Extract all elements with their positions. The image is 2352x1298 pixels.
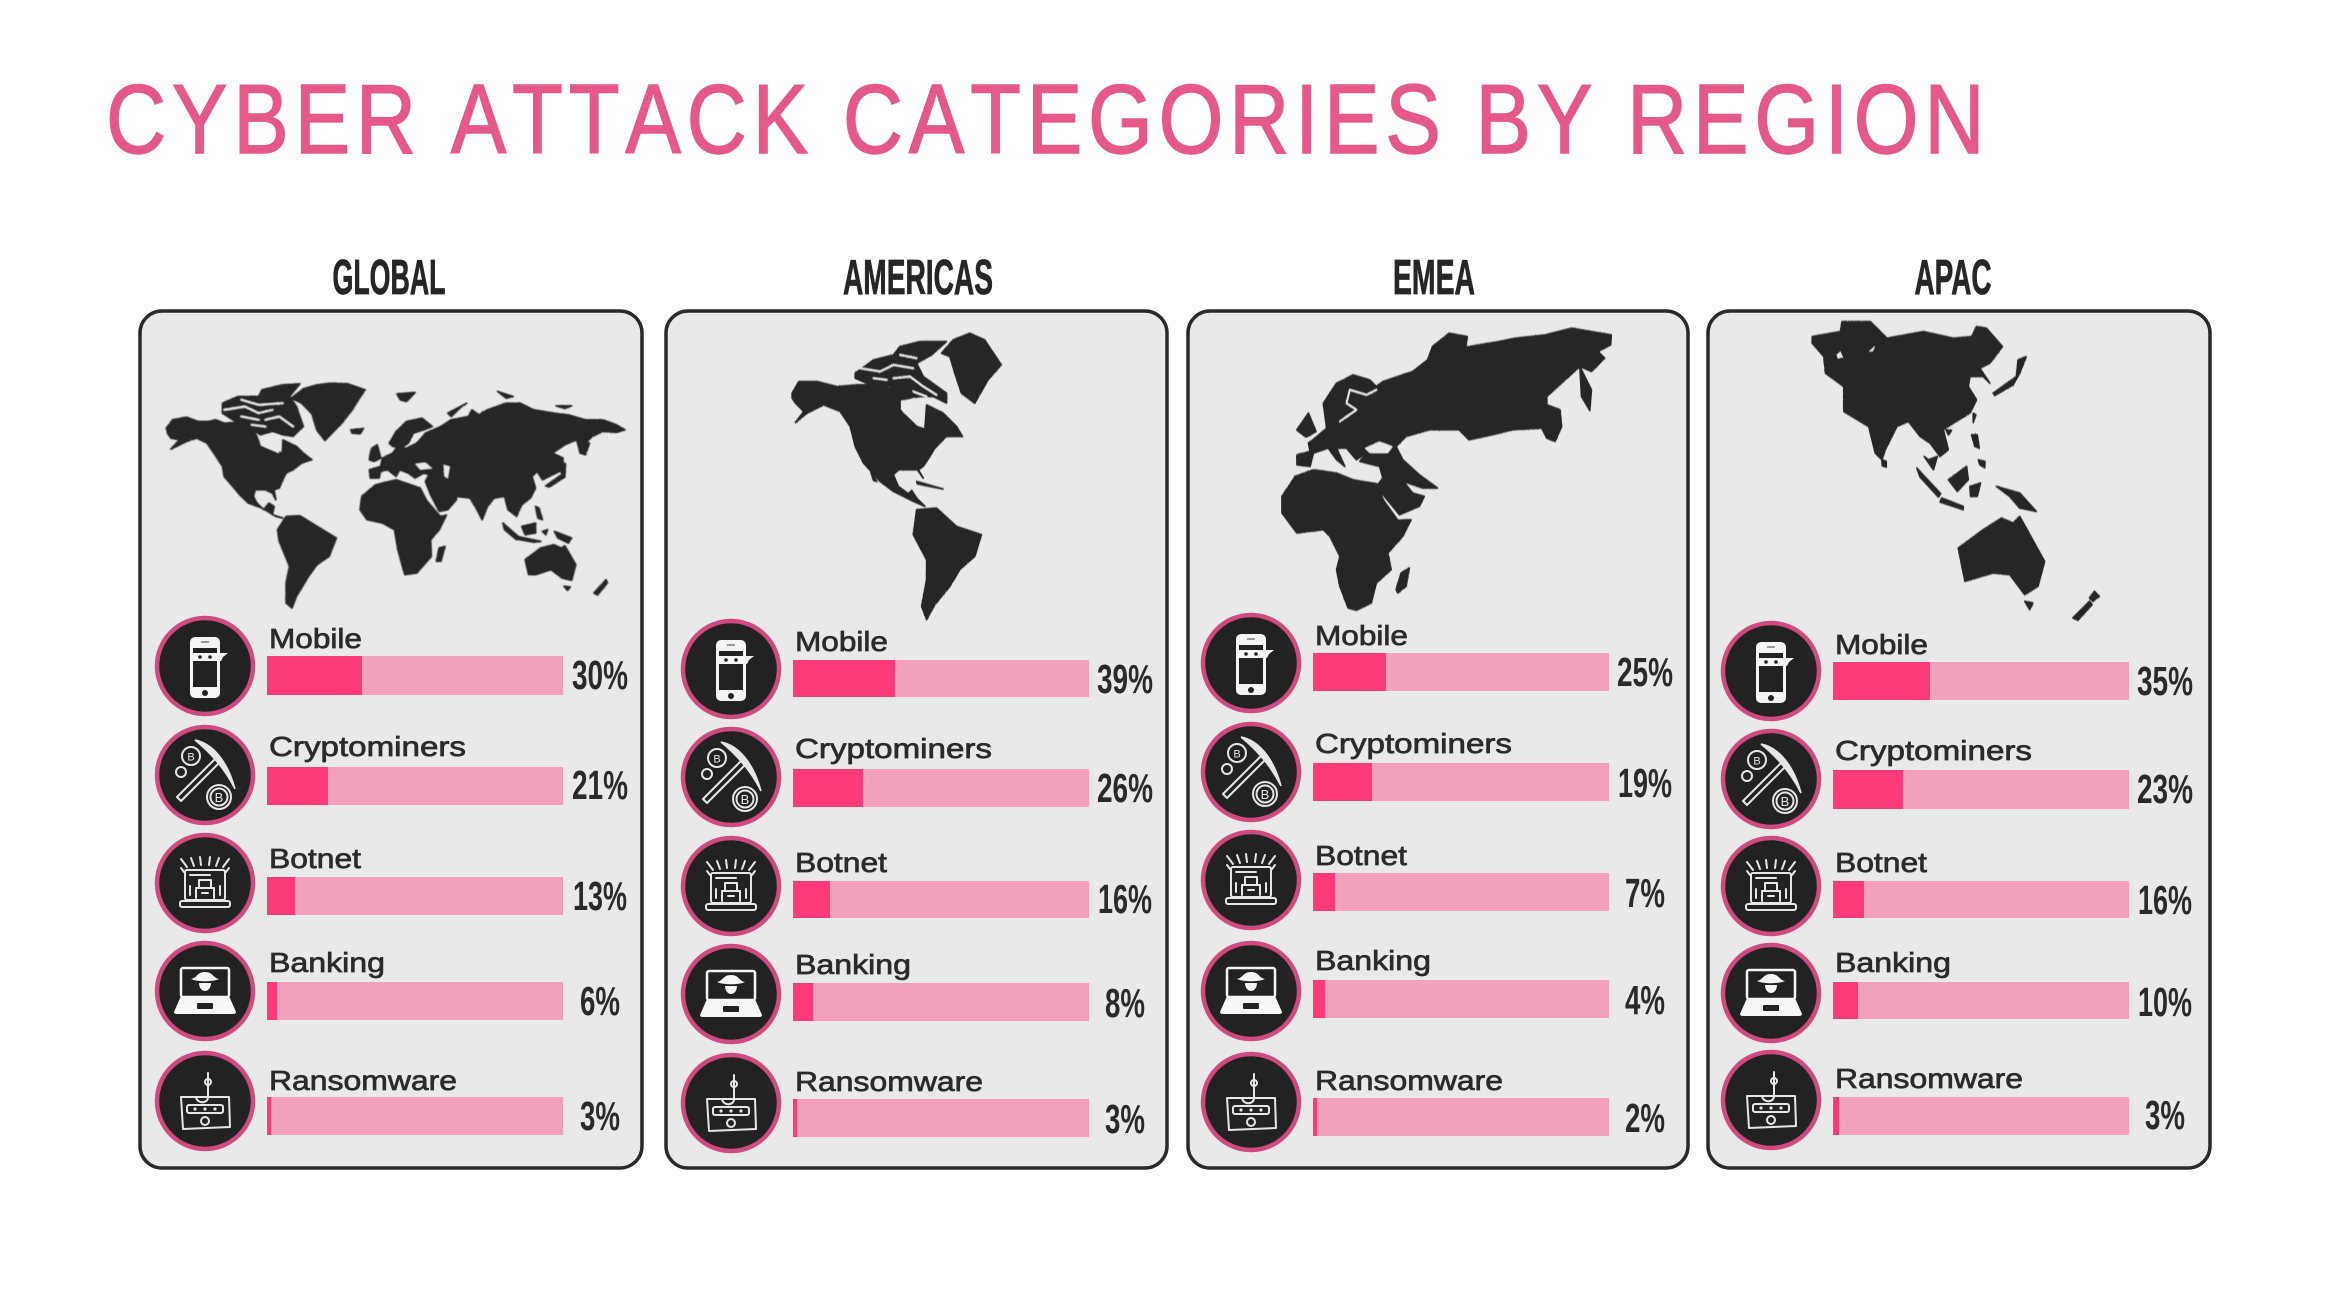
panel: Global bbox=[140, 311, 642, 1168]
row: Ransomware: Ransomware bbox=[269, 1065, 457, 1096]
row: Banking: 8% bbox=[1105, 980, 1145, 1026]
icon: mobile bbox=[157, 618, 253, 714]
row: Ransomware: Ransomware bbox=[1835, 1063, 2023, 1094]
row: Cryptominers bbox=[1203, 724, 1672, 820]
row: Botnet: Botnet bbox=[269, 843, 361, 874]
row: Cryptominers bbox=[157, 727, 628, 823]
panel: Americas bbox=[666, 311, 1167, 1168]
row: Mobile: 35% bbox=[2137, 658, 2193, 704]
icon: cryptominer bbox=[683, 729, 779, 825]
row: Banking bbox=[157, 943, 620, 1039]
row: Banking: Banking bbox=[269, 947, 385, 978]
row: Ransomware: 3% bbox=[1105, 1096, 1145, 1142]
icon: ransomware bbox=[1203, 1054, 1299, 1150]
row: Mobile: Mobile bbox=[795, 626, 888, 657]
row: Mobile: Mobile bbox=[1835, 629, 1928, 660]
title: CYBER ATTACK CATEGORIES BY REGION bbox=[106, 66, 1985, 175]
row: Botnet bbox=[157, 835, 627, 931]
row: Banking: Banking bbox=[795, 949, 911, 980]
row: Cryptominers: 21% bbox=[572, 762, 628, 808]
row: Botnet bbox=[1723, 838, 2192, 934]
icon: ransomware bbox=[683, 1055, 779, 1151]
row: Botnet: Botnet bbox=[1315, 840, 1407, 871]
row: Ransomware: 3% bbox=[580, 1093, 620, 1139]
icon: cryptominer bbox=[1203, 724, 1299, 820]
icon: botnet bbox=[1723, 838, 1819, 934]
icon: banking bbox=[157, 943, 253, 1039]
row: Botnet: 7% bbox=[1625, 870, 1665, 916]
row: Mobile: 25% bbox=[1617, 649, 1673, 695]
row: Cryptominers: Cryptominers bbox=[269, 731, 466, 762]
row: Ransomware: 3% bbox=[2145, 1092, 2185, 1138]
row: Ransomware bbox=[1203, 1054, 1665, 1150]
row: Botnet bbox=[683, 838, 1152, 934]
row: Botnet: 16% bbox=[1098, 876, 1152, 922]
row: Ransomware: 2% bbox=[1625, 1095, 1665, 1141]
row: Ransomware bbox=[157, 1053, 620, 1149]
row: Ransomware: Ransomware bbox=[795, 1066, 983, 1097]
row: Cryptominers: Cryptominers bbox=[1315, 728, 1512, 759]
row: Ransomware bbox=[1723, 1052, 2185, 1148]
icon: mobile bbox=[1203, 615, 1299, 711]
heading: APAC: APAC bbox=[1914, 251, 1992, 305]
row: Cryptominers: 19% bbox=[1618, 760, 1672, 806]
icon: cryptominer bbox=[1723, 731, 1819, 827]
row: Banking: 6% bbox=[580, 978, 620, 1024]
row: Banking: 10% bbox=[2138, 979, 2192, 1025]
row: Cryptominers: Cryptominers bbox=[795, 733, 992, 764]
icon: banking bbox=[1203, 943, 1299, 1039]
icon: cryptominer bbox=[157, 727, 253, 823]
panel: APAC bbox=[1708, 311, 2210, 1168]
row: Mobile: 30% bbox=[572, 652, 628, 698]
row: Banking: 4% bbox=[1625, 977, 1665, 1023]
row: Botnet: Botnet bbox=[795, 847, 887, 878]
row: Banking bbox=[683, 946, 1145, 1042]
row: Banking bbox=[1203, 943, 1665, 1039]
row: Ransomware: Ransomware bbox=[1315, 1065, 1503, 1096]
row: Ransomware bbox=[683, 1055, 1145, 1151]
heading: Global: GLOBAL bbox=[332, 251, 446, 305]
row: Botnet: 13% bbox=[573, 873, 627, 919]
row: Mobile: 39% bbox=[1097, 656, 1153, 702]
row: Cryptominers: 23% bbox=[2137, 766, 2193, 812]
map: APAC bbox=[1812, 322, 2099, 620]
icon: botnet bbox=[1203, 832, 1299, 928]
row: Cryptominers bbox=[1723, 731, 2193, 827]
row: Mobile bbox=[1723, 623, 2193, 719]
map: Americas bbox=[792, 333, 1001, 620]
row: Banking: Banking bbox=[1835, 947, 1951, 978]
row: Botnet: 16% bbox=[2138, 877, 2192, 923]
icon: botnet bbox=[157, 835, 253, 931]
map: EMEA bbox=[1282, 328, 1611, 610]
row: Mobile: Mobile bbox=[1315, 620, 1408, 651]
icon: banking bbox=[1723, 945, 1819, 1041]
row: Botnet bbox=[1203, 832, 1665, 928]
heading: Americas: AMERICAS bbox=[843, 251, 993, 305]
row: Botnet: Botnet bbox=[1835, 847, 1927, 878]
row: Banking: Banking bbox=[1315, 945, 1431, 976]
row: Cryptominers: Cryptominers bbox=[1835, 735, 2032, 766]
row: Cryptominers: 26% bbox=[1097, 765, 1153, 811]
heading: EMEA: EMEA bbox=[1393, 251, 1475, 305]
icon: mobile bbox=[683, 621, 779, 717]
row: Mobile bbox=[157, 618, 628, 714]
map: world bbox=[166, 383, 625, 608]
row: Mobile: Mobile bbox=[269, 623, 362, 654]
icon: mobile bbox=[1723, 623, 1819, 719]
icon: banking bbox=[683, 946, 779, 1042]
row: Mobile bbox=[683, 621, 1153, 717]
icon: ransomware bbox=[157, 1053, 253, 1149]
panel: EMEA bbox=[1188, 311, 1688, 1168]
icon: botnet bbox=[683, 838, 779, 934]
icon: ransomware bbox=[1723, 1052, 1819, 1148]
row: Banking bbox=[1723, 945, 2192, 1041]
row: Mobile bbox=[1203, 615, 1673, 711]
row: Cryptominers bbox=[683, 729, 1153, 825]
